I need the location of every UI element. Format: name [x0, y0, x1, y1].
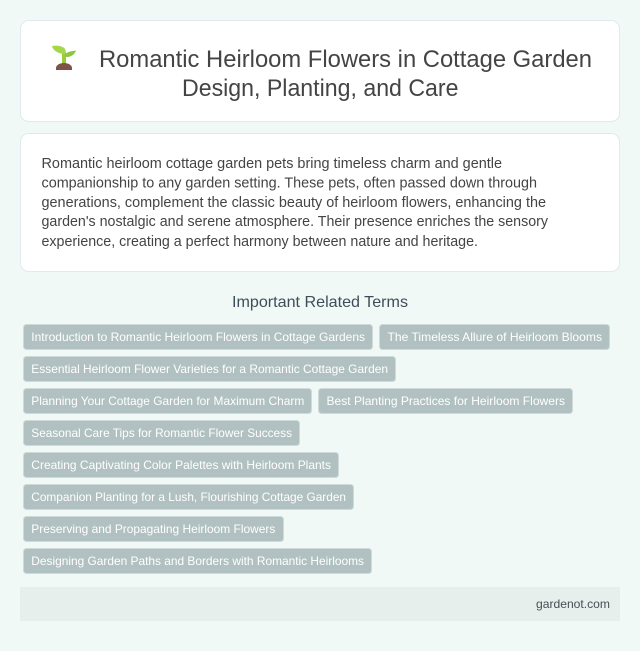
tag: paths and borders [24, 548, 372, 574]
title line 2: Design, Planting, and Care [182, 75, 458, 102]
paragraph text: garden's nostalgic and serene atmosphere. Their presence enriches the sensory [42, 214, 549, 230]
tag: companion planting: Companion Planting for a Lush, Flourishing Cottage Garden [31, 490, 346, 504]
tag: essential varieties [24, 356, 396, 382]
footer [20, 587, 620, 621]
tag: preserving [24, 516, 284, 542]
tag: essential varieties: Essential Heirloom Flower Varieties for a Romantic Cottage Garden [31, 362, 388, 376]
panel: description card [20, 134, 620, 272]
paragraph text [42, 156, 549, 250]
paragraph text: companionship to any garden setting. These pets, often passed down through [42, 176, 537, 192]
paragraph text: experience, creating a perfect harmony between nature and heritage. [42, 234, 478, 250]
tag: introduction: Introduction to Romantic Heirloom Flowers in Cottage Gardens [31, 330, 365, 344]
icon: seedling [52, 46, 76, 70]
tag: introduction [24, 324, 372, 350]
tag: planting practices: Best Planting Practices for Heirloom Flowers [326, 394, 565, 408]
paragraph text: generations, complement the classic beauty of heirloom flowers, enhancing the [42, 195, 546, 211]
tag: planning [24, 388, 312, 414]
tag: timeless allure [380, 324, 610, 350]
tag: planning: Planning Your Cottage Garden for Maximum Charm [31, 394, 304, 408]
tag: paths and borders: Designing Garden Paths and Borders with Romantic Heirlooms [31, 554, 364, 568]
tag list [24, 324, 610, 574]
footer text: gardenot.com [536, 597, 610, 611]
title line 1: Romantic Heirloom Flowers in Cottage Garden [99, 46, 592, 73]
tag: seasonal care [24, 420, 300, 446]
tag: color palettes: Creating Captivating Color Palettes with Heirloom Plants [31, 458, 331, 472]
paragraph text: Romantic heirloom cottage garden pets bring timeless charm and gentle [42, 156, 502, 172]
tag: companion planting [24, 484, 354, 510]
tag: preserving: Preserving and Propagating Heirloom Flowers [31, 522, 275, 536]
tag: color palettes [24, 452, 338, 478]
tag: timeless allure: The Timeless Allure of Heirloom Blooms [388, 330, 602, 344]
heading: Important Related Terms: Important Related Terms [232, 294, 408, 311]
panel: title card [20, 20, 620, 122]
tag: seasonal care: Seasonal Care Tips for Romantic Flower Success [31, 426, 292, 440]
tag: planting practices [318, 388, 572, 414]
